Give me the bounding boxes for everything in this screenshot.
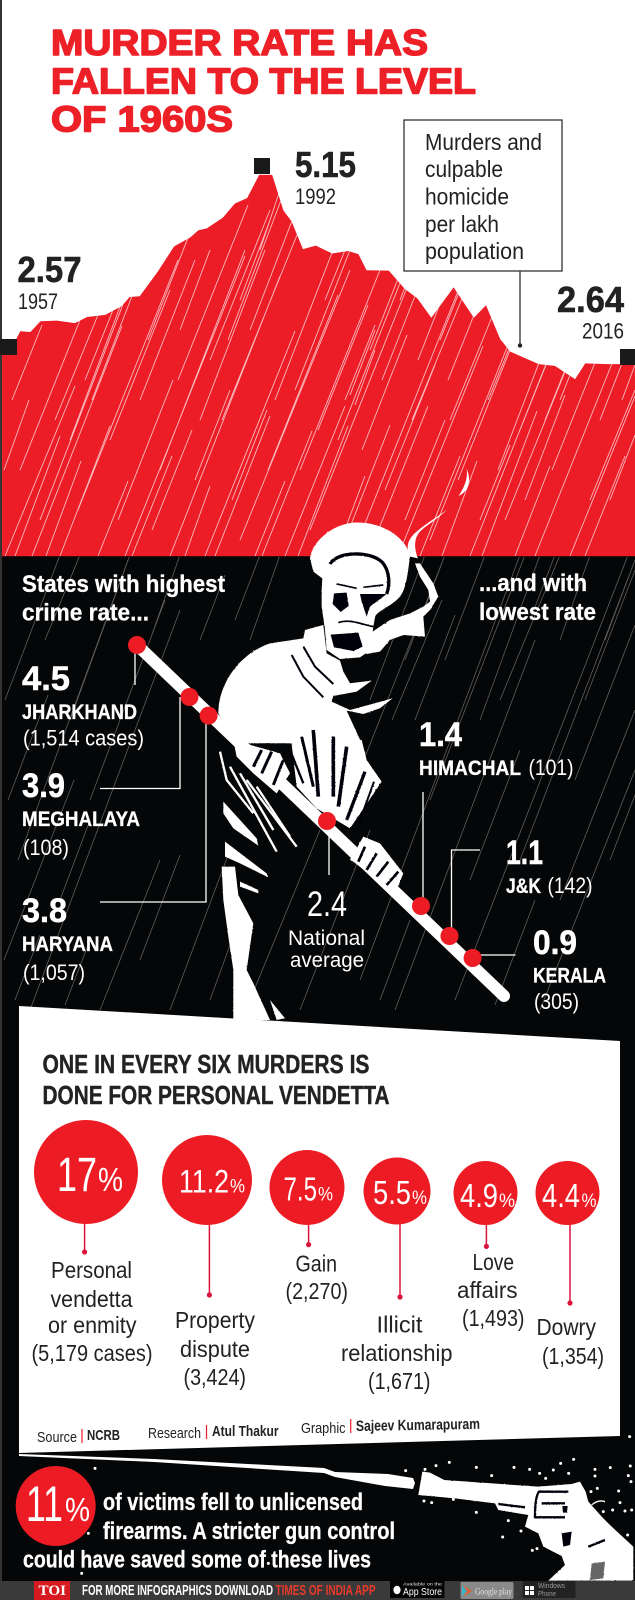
callout: chart definition: population: [425, 238, 524, 264]
stars / bullet sparks: [82, 1437, 632, 1597]
left edge strip: [0, 0, 2, 1581]
panel heading: [42, 1049, 390, 1110]
badge: Windows Phone: Windows: [538, 1581, 565, 1590]
label: 1957 value: 2.57: [18, 249, 82, 290]
title: FALLEN TO THE LEVEL: [51, 60, 476, 102]
bubble: gain 7.5%: (2,270): [286, 1278, 348, 1304]
credits: NCRB: [87, 1427, 120, 1444]
badge: Google play: [460, 1582, 514, 1599]
stat: Himachal: [419, 716, 574, 780]
stat: national average: 2.4: [307, 885, 347, 924]
callout: chart definition: homicide: [425, 184, 509, 210]
stat: Kerala: KERALA: [533, 964, 606, 988]
panel heading: highest crime states: [22, 571, 225, 626]
bubble: property dispute 11.2%: %: [230, 1176, 245, 1198]
bubble: dowry 4.4%: [536, 1161, 604, 1369]
figure hands: [233, 740, 403, 890]
label: 1992 value: 1992: [295, 184, 336, 209]
stat: Himachal: (101): [528, 755, 574, 780]
stat: national average: average: [290, 948, 364, 972]
black lower section: [0, 556, 635, 1582]
bubble: dowry 4.4%: %: [582, 1191, 597, 1212]
bubble: dowry 4.4%: Dowry: [536, 1314, 596, 1340]
panel heading: highest crime states: crime rate...: [22, 600, 149, 626]
TOI logo: [34, 1581, 70, 1600]
badge: Google play: Google play: [475, 1588, 512, 1598]
stat: Meghalaya: MEGHALAYA: [22, 808, 140, 831]
footer promo text: TIMES OF INDIA APP: [276, 1582, 376, 1599]
leader lines for stick markers: [100, 645, 516, 955]
panel heading: lowest crime states: lowest rate: [479, 599, 596, 626]
stat: Kerala: (305): [534, 989, 579, 1014]
stat: J&K: (142): [548, 873, 592, 898]
label: 1992 value: 5.15: [295, 144, 356, 185]
badge: Windows Phone: [522, 1581, 576, 1598]
credits: Graphic: [301, 1420, 346, 1437]
bubble: love affairs 4.9%: [454, 1161, 524, 1331]
stat: Himachal: HIMACHAL: [419, 757, 521, 780]
stat: Kerala: 0.9: [533, 924, 577, 962]
bubble: gain 7.5%: 7.5: [284, 1170, 317, 1208]
panel heading: highest crime states: States with highest: [22, 571, 225, 598]
credits: Atul Thakur: [212, 1423, 279, 1440]
figure: man with stick: [137, 468, 504, 1020]
icon: revolver in hand: [418, 1472, 633, 1581]
bubble: property dispute 11.2%: [162, 1135, 255, 1390]
bubble: personal vendetta 17%: [32, 1120, 152, 1366]
label: 1957 value: [18, 249, 82, 314]
panel heading: ONE IN EVERY SIX MURDERS IS: [42, 1049, 370, 1079]
bubble: illicit relationship 5.5%: relationship: [341, 1340, 452, 1366]
stat: Jharkhand: 4.5: [22, 660, 70, 698]
callout: chart definition: per lakh: [425, 211, 499, 237]
callout: unlicensed firearms: of victims fell to unlicensed: [103, 1489, 363, 1516]
stat: national average: [288, 885, 365, 972]
bubble: dowry 4.4%: 4.4: [542, 1177, 580, 1214]
bubble: illicit relationship 5.5%: %: [412, 1188, 427, 1209]
marker: 1992 peak: [254, 158, 270, 174]
badge: App Store: Available on the: [403, 1582, 443, 1586]
footer strip: [0, 1581, 635, 1600]
bubble: dowry 4.4%: (1,354): [542, 1343, 604, 1369]
rain over black section: [4, 550, 635, 1010]
bubble: gain 7.5%: %: [318, 1184, 333, 1206]
figure shoulder and scarf: [218, 625, 393, 743]
label: 2016 value: 2016: [582, 318, 624, 344]
stat: Jharkhand: JHARKHAND: [22, 701, 137, 724]
title: OF 1960S: [51, 98, 233, 140]
bubble: personal vendetta 17%: %: [98, 1161, 123, 1198]
bubble: love affairs 4.9%: (1,493): [462, 1305, 524, 1331]
bubble: personal vendetta 17%: (5,179 cases): [32, 1340, 152, 1366]
callout: unlicensed firearms: could have saved some of these lives: [23, 1546, 371, 1574]
credits: Research: [148, 1425, 201, 1442]
area chart: murder rate 1957-2016: [2, 175, 635, 556]
bubble: personal vendetta 17%: 17: [57, 1149, 97, 1202]
callout: chart definition: Murders and: [425, 129, 542, 155]
title: MURDER RATE HAS: [51, 22, 428, 63]
panel heading: lowest crime states: ...and with: [479, 570, 587, 597]
label: 2016 value: 2.64: [557, 279, 624, 320]
label: 1957 value: 1957: [18, 289, 58, 314]
stat: Haryana: [22, 892, 113, 985]
stat: Himachal: 1.4: [419, 716, 462, 754]
red markers on stick: [128, 636, 482, 967]
stat: J&K: [506, 834, 592, 898]
callout: unlicensed firearms: 11: [26, 1476, 63, 1532]
bubble: property dispute 11.2%: 11.2: [179, 1164, 229, 1200]
bubble: love affairs 4.9%: 4.9: [460, 1177, 498, 1214]
wooden stick: [137, 645, 504, 996]
callout: unlicensed firearms: %: [65, 1491, 90, 1528]
stat: Haryana: (1,057): [23, 960, 85, 985]
label: 1992 value: [295, 144, 356, 209]
stat: J&K: J&K: [506, 875, 541, 898]
callout: unlicensed firearms: firearms. A stricter gun control: [103, 1518, 395, 1545]
bubble: property dispute 11.2%: dispute: [180, 1336, 250, 1362]
stat: Kerala: [533, 924, 606, 1014]
badge: App Store: [390, 1581, 444, 1598]
title: [51, 22, 476, 140]
callout: unlicensed firearms: [16, 1466, 395, 1574]
bubble: illicit relationship 5.5%: (1,671): [368, 1368, 430, 1394]
stat: national average: National: [288, 926, 365, 950]
stat: Jharkhand: (1,514 cases): [23, 726, 144, 750]
credits: Sajeev Kumarapuram: [356, 1416, 480, 1435]
bubble: personal vendetta 17%: or enmity: [48, 1312, 137, 1338]
bubble: love affairs 4.9%: %: [499, 1191, 515, 1212]
credits: [37, 1416, 480, 1446]
badge: App Store: App Store: [403, 1587, 442, 1598]
callout: chart definition: [404, 120, 562, 348]
panel heading: DONE FOR PERSONAL VENDETTA: [42, 1080, 390, 1110]
stat: Meghalaya: 3.9: [22, 767, 65, 805]
marker: 2016 end: [620, 349, 635, 365]
stat: J&K: 1.1: [506, 834, 543, 872]
bubble: love affairs 4.9%: Love: [472, 1249, 514, 1275]
bubble: illicit relationship 5.5%: [341, 1158, 452, 1394]
bubble: illicit relationship 5.5%: 5.5: [373, 1174, 411, 1211]
panel heading: lowest crime states: [479, 570, 596, 626]
bubble: personal vendetta 17%: Personal: [51, 1257, 132, 1283]
callout: chart definition: culpable: [425, 156, 503, 182]
bubble: love affairs 4.9%: affairs: [457, 1277, 518, 1303]
bubble: personal vendetta 17%: vendetta: [50, 1286, 133, 1312]
marker: 1957 start: [0, 339, 17, 355]
bubble: property dispute 11.2%: (3,424): [184, 1364, 246, 1390]
stat: Haryana: 3.8: [22, 892, 67, 930]
bubble: gain 7.5%: [270, 1150, 348, 1304]
bubble: property dispute 11.2%: Property: [175, 1307, 255, 1333]
stat: Meghalaya: [22, 767, 140, 860]
footer promo text: FOR MORE INFOGRAPHICS DOWNLOAD: [82, 1582, 273, 1599]
stat: Haryana: HARYANA: [22, 933, 113, 956]
panel: motives: [19, 1006, 620, 1453]
bubble: gain 7.5%: Gain: [296, 1250, 337, 1276]
credits: Source: [37, 1429, 77, 1446]
figure chest, arm hatching and leg: [220, 730, 382, 1020]
stat: Jharkhand: [22, 660, 144, 750]
gun barrel streak: [19, 1454, 415, 1489]
badge: Windows Phone: Phone: [538, 1589, 556, 1598]
bubble: illicit relationship 5.5%: Illicit: [376, 1312, 423, 1338]
stat: Meghalaya: (108): [23, 835, 69, 860]
TOI logo: TOI: [38, 1583, 66, 1599]
figure head and smoke: [310, 468, 469, 659]
label: 2016 value: [557, 279, 624, 344]
